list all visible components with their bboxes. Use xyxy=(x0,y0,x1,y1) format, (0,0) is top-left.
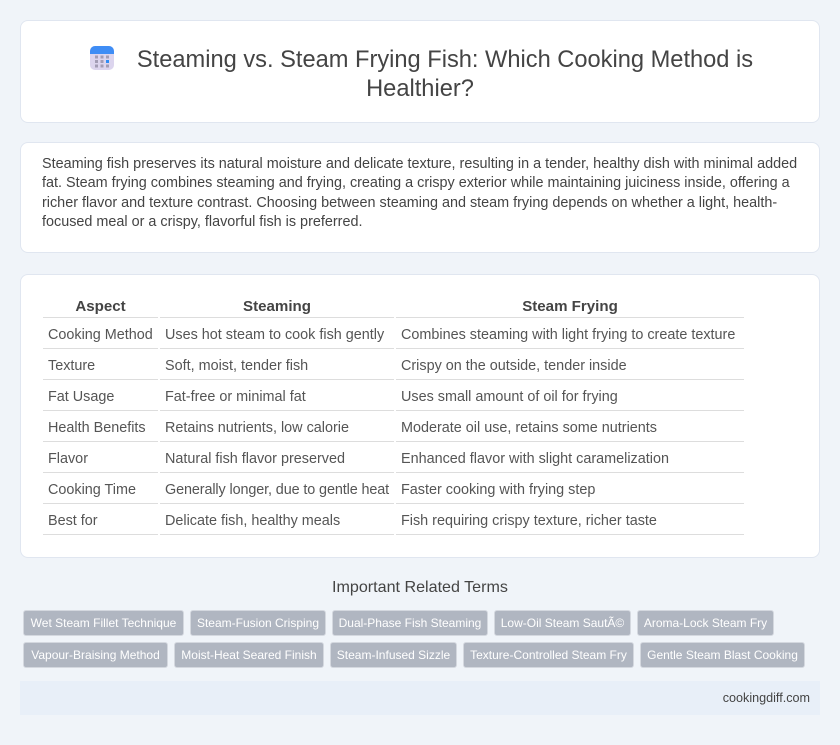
tag xyxy=(174,642,324,668)
row: fat usage: Fat Usage xyxy=(48,389,114,405)
row: fat usage: Uses small amount of oil for frying xyxy=(401,389,618,405)
tag: Wet Steam Fillet Technique xyxy=(31,616,176,630)
row: cooking method: Cooking Method xyxy=(48,327,153,343)
row: flavor: Flavor xyxy=(48,451,88,467)
tag xyxy=(23,642,168,668)
tag xyxy=(23,610,184,636)
row: best for xyxy=(48,513,657,529)
row: texture: Texture xyxy=(48,358,95,374)
row: cooking time: Cooking Time xyxy=(48,482,136,498)
footer source: cookingdiff.com xyxy=(723,691,810,705)
row: best for: Best for xyxy=(48,513,98,529)
row: texture xyxy=(48,358,627,374)
row: health benefits: Retains nutrients, low calorie xyxy=(165,420,349,436)
tag: Vapour-Braising Method xyxy=(31,648,160,662)
table header: Steam Frying xyxy=(522,298,618,315)
tag: Aroma-Lock Steam Fry xyxy=(644,616,767,630)
tag xyxy=(463,642,634,668)
table header: Aspect xyxy=(75,298,126,315)
row: flavor xyxy=(48,451,669,467)
intro text: fat. Steam frying combines steaming and frying, creating a crispy exterior while maintaining juiciness inside, offering a xyxy=(42,175,790,191)
tag: Moist-Heat Seared Finish xyxy=(181,648,317,662)
row: cooking method: Combines steaming with light frying to create texture xyxy=(401,327,735,343)
row: best for: Fish requiring crispy texture, richer taste xyxy=(401,513,657,529)
icon: calendar xyxy=(90,46,114,70)
row: cooking method xyxy=(48,327,735,343)
tag xyxy=(640,642,805,668)
row: cooking time: Faster cooking with frying step xyxy=(401,482,595,498)
tag xyxy=(330,642,457,668)
row: cooking time: Generally longer, due to gentle heat xyxy=(165,482,389,498)
table header xyxy=(75,298,618,315)
intro text: focused meal or a crispy, flavorful fish is preferred. xyxy=(42,214,362,230)
row: cooking time xyxy=(48,482,595,498)
row: health benefits: Moderate oil use, retains some nutrients xyxy=(401,420,657,436)
row: flavor: Natural fish flavor preserved xyxy=(165,451,345,467)
row: flavor: Enhanced flavor with slight caramelization xyxy=(401,451,669,467)
row: health benefits xyxy=(48,420,657,436)
tag xyxy=(494,610,631,636)
tag xyxy=(637,610,774,636)
related terms heading: Important Related Terms xyxy=(332,578,508,596)
tag xyxy=(190,610,326,636)
row: best for: Delicate fish, healthy meals xyxy=(165,513,340,529)
footer bar xyxy=(20,681,820,715)
title xyxy=(137,47,753,102)
title: Steaming vs. Steam Frying Fish: Which Cooking Method is xyxy=(137,47,753,73)
tag: Steam-Infused Sizzle xyxy=(337,648,450,662)
header card xyxy=(20,20,820,123)
related term tags xyxy=(23,610,805,668)
row: texture: Soft, moist, tender fish xyxy=(165,358,308,374)
row: cooking method: Uses hot steam to cook fish gently xyxy=(165,327,384,343)
row: fat usage xyxy=(48,389,618,405)
panel: comparison table xyxy=(20,274,820,558)
table header: Steaming xyxy=(243,298,311,315)
tag: Steam-Fusion Crisping xyxy=(197,616,319,630)
tag xyxy=(332,610,488,636)
row: health benefits: Health Benefits xyxy=(48,420,146,436)
intro text: richer flavor and texture contrast. Choosing between steaming and steam frying depends on whether a light, health- xyxy=(42,195,777,211)
panel: introduction xyxy=(20,142,820,253)
row: texture: Crispy on the outside, tender inside xyxy=(401,358,627,374)
tag: Texture-Controlled Steam Fry xyxy=(470,648,627,662)
comparison table xyxy=(43,298,744,535)
tag: Low-Oil Steam SautÃ© xyxy=(501,616,624,630)
title: Healthier? xyxy=(366,76,474,102)
intro text xyxy=(42,156,797,230)
tag: Dual-Phase Fish Steaming xyxy=(339,616,481,630)
row: fat usage: Fat-free or minimal fat xyxy=(165,389,306,405)
tag: Gentle Steam Blast Cooking xyxy=(647,648,798,662)
intro text: Steaming fish preserves its natural moisture and delicate texture, resulting in a tender, healthy dish with minimal added xyxy=(42,156,797,172)
